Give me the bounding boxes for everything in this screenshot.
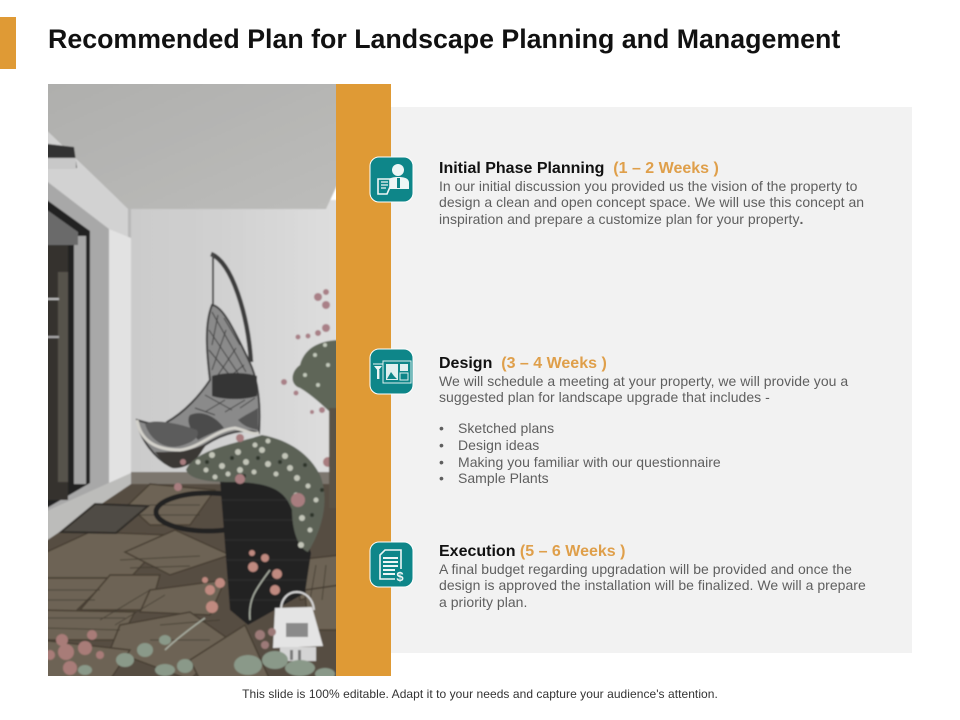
- side wall: [48, 132, 118, 222]
- back wall: [130, 200, 336, 472]
- bullet list: Sample Plants: [458, 470, 549, 486]
- heading: Initial Phase Planning (1 – 2 Weeks ): [439, 160, 719, 177]
- chair arm: [211, 254, 251, 362]
- title: Recommended Plan for Landscape Planning and Management: [48, 24, 840, 54]
- description: a priority plan.: [439, 594, 527, 610]
- chair rim: [137, 420, 259, 450]
- orange column: [336, 84, 391, 676]
- bullet list: •: [439, 437, 444, 453]
- chair basket: [137, 305, 260, 467]
- door frame: [48, 182, 110, 511]
- icon: budget document with dollar: $: [396, 569, 404, 584]
- heading: Execution (5 – 6 Weeks ): [439, 543, 625, 560]
- foliage on planter: [174, 434, 333, 552]
- description: [439, 372, 848, 405]
- parquet tiles: [40, 484, 340, 680]
- section: execution: [439, 543, 866, 610]
- description: A final budget regarding upgradation will be provided and once the: [439, 560, 852, 576]
- lantern: [281, 592, 314, 610]
- bullet list: Sketched plans: [458, 420, 554, 436]
- bullet list: Design ideas: [458, 437, 539, 453]
- cushions: [188, 413, 224, 440]
- sill: [48, 473, 132, 540]
- foreground plants: [45, 628, 335, 680]
- pink geranium: [165, 550, 282, 650]
- description: [439, 560, 866, 610]
- content panel background: [391, 107, 912, 653]
- upper right flowers: [280, 288, 336, 485]
- wall lamp: [48, 143, 78, 168]
- white pillar: [109, 229, 131, 483]
- section: initial phase planning: [439, 160, 864, 227]
- section: design: [439, 355, 848, 486]
- bullet list: •: [439, 454, 444, 470]
- pillow: [212, 373, 257, 399]
- bullet list: Making you familiar with our questionnaire: [458, 454, 721, 470]
- bullet list: •: [439, 470, 444, 486]
- door mat: [61, 504, 148, 533]
- planter: [220, 478, 311, 625]
- floor: [40, 484, 340, 680]
- bullet list: •: [439, 420, 444, 436]
- chair base ring: [153, 490, 225, 534]
- description: design is approved the installation will be finalized. We will a prepare: [439, 577, 866, 593]
- footer note: This slide is 100% editable. Adapt it to your needs and capture your audience's attention.: [242, 687, 718, 701]
- description: design a clean and open concept space. We will use this concept an: [439, 194, 864, 210]
- description: We will schedule a meeting at your property, we will provide you a: [439, 372, 848, 388]
- skirting: [131, 472, 336, 485]
- description: [439, 178, 864, 227]
- accent bar: [0, 17, 16, 69]
- description: suggested plan for landscape upgrade that includes -: [439, 389, 770, 405]
- icon: design board: [370, 348, 414, 394]
- photo: balcony with hanging chair: [48, 84, 336, 676]
- description: inspiration and prepare a customize plan for your property.: [439, 211, 803, 227]
- under seat: [155, 444, 205, 468]
- icon: person with document: [370, 156, 414, 202]
- description: In our initial discussion you provided us the vision of the property to: [439, 178, 857, 194]
- basket weave: [195, 312, 255, 415]
- chain: [212, 254, 214, 305]
- ceiling: [48, 84, 336, 210]
- heading: Design (3 – 4 Weeks ): [439, 355, 607, 372]
- bullet list: [439, 420, 721, 486]
- icon: budget document with dollar: [370, 542, 414, 588]
